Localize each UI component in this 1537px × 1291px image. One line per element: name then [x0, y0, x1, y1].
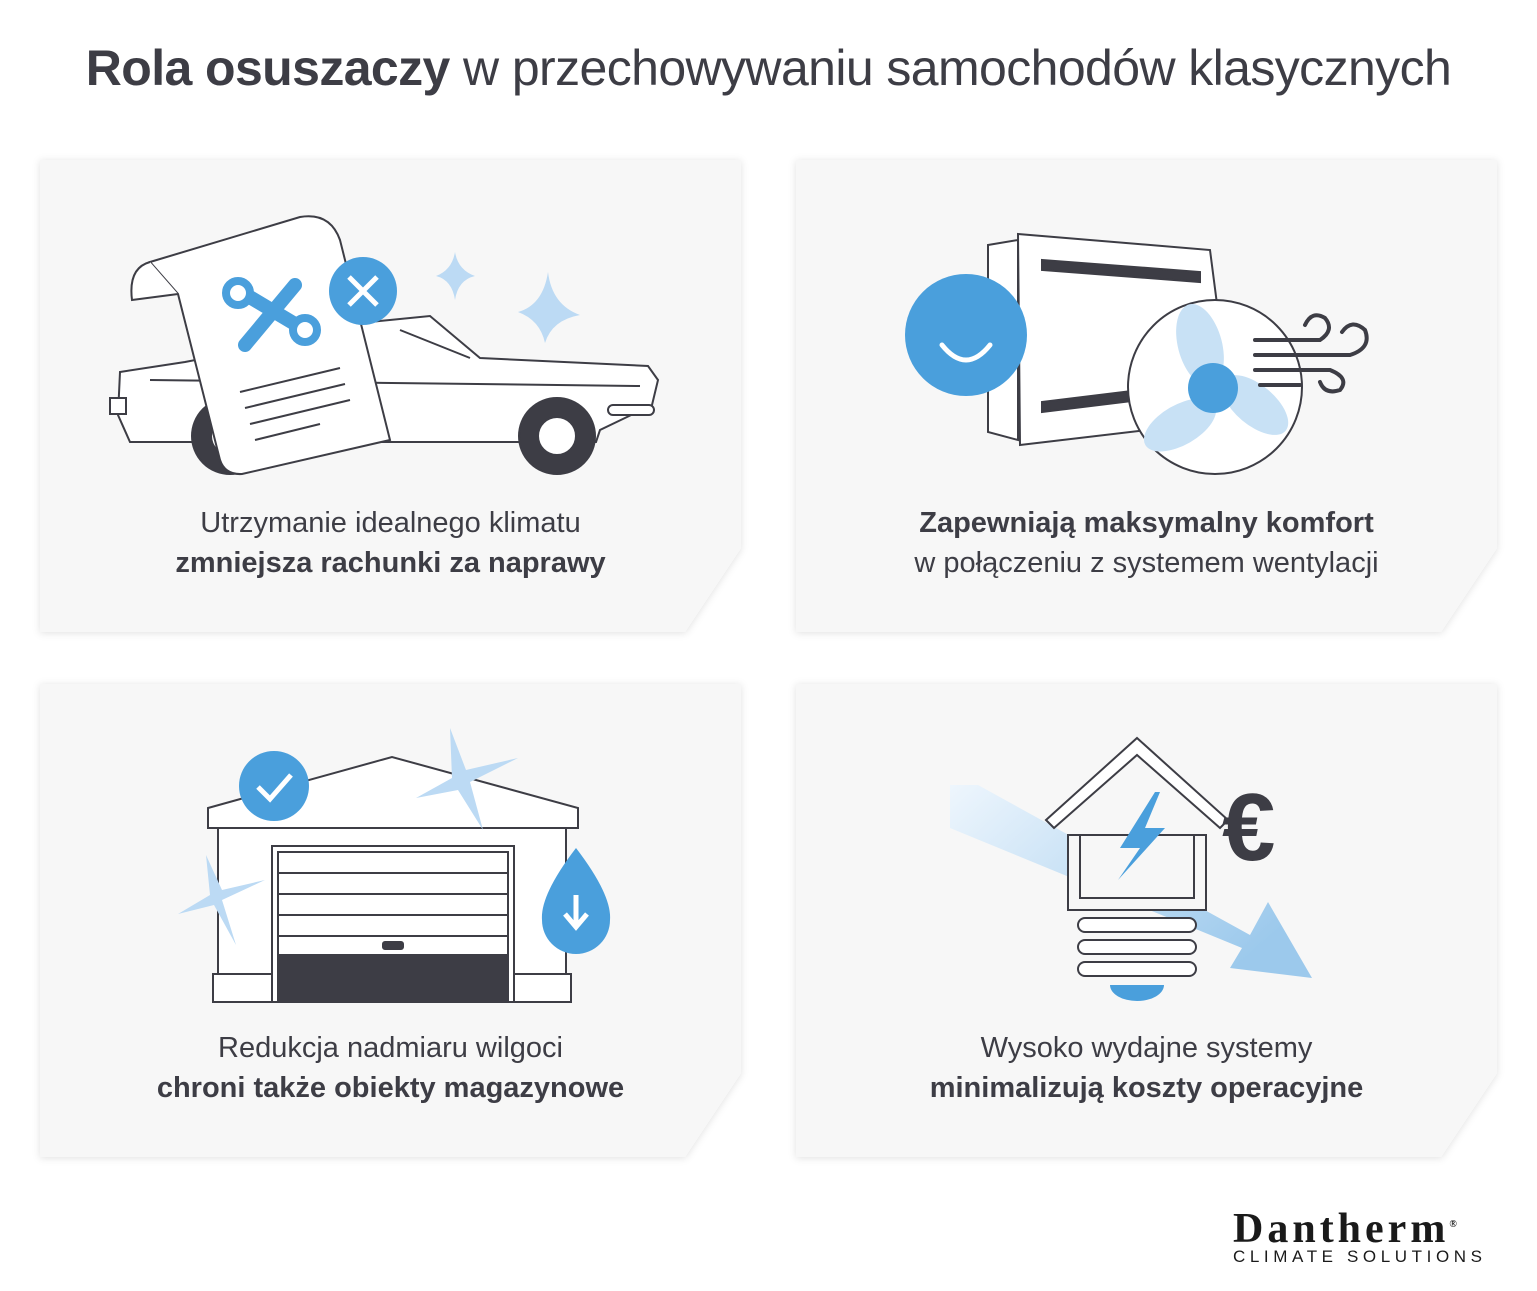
icon: air unit — [988, 234, 1302, 474]
icon: euro: € — [1222, 774, 1275, 881]
icon: wind — [1255, 315, 1367, 391]
panel: costs — [796, 684, 1497, 1157]
caption 2: Zapewniają maksymalny komfort — [919, 507, 1374, 539]
title: Rola osuszaczy w przechowywaniu samochodów klasycznych — [86, 40, 1451, 96]
icon: garage — [208, 757, 578, 1002]
caption 1: zmniejsza rachunki za naprawy — [175, 547, 606, 579]
caption 3: Redukcja nadmiaru wilgoci — [218, 1032, 563, 1064]
caption 4: Wysoko wydajne systemy — [981, 1032, 1312, 1064]
caption 2 — [914, 507, 1379, 579]
icon: x circle — [329, 257, 397, 325]
caption 4 — [930, 1032, 1363, 1104]
panel: comfort — [796, 160, 1497, 632]
caption 1 — [175, 507, 606, 579]
caption 1: Utrzymanie idealnego klimatu — [200, 507, 581, 539]
icon: smiley — [905, 274, 1027, 396]
icon: sparkles — [436, 252, 580, 343]
icon: wrench — [243, 285, 305, 345]
icon: down arrow — [950, 785, 1312, 978]
icon: document — [131, 216, 390, 474]
caption 3 — [157, 1032, 624, 1104]
caption 2: w połączeniu z systemem wentylacji — [914, 547, 1379, 579]
icon: drop — [542, 848, 610, 954]
logo: CLIMATE SOLUTIONS — [1233, 1247, 1487, 1266]
icon: check — [239, 751, 309, 821]
icon: house bulb — [1046, 738, 1228, 976]
caption 3: chroni także obiekty magazynowe — [157, 1072, 624, 1104]
logo — [1233, 1206, 1487, 1266]
icon: sparkles — [178, 728, 518, 945]
icon: fan — [1135, 299, 1298, 462]
panel: repairs — [40, 160, 741, 632]
icon: classic car — [110, 316, 658, 474]
caption 4: minimalizują koszty operacyjne — [930, 1072, 1363, 1104]
logo: Dantherm® — [1233, 1206, 1461, 1252]
panel: garage — [40, 684, 741, 1157]
